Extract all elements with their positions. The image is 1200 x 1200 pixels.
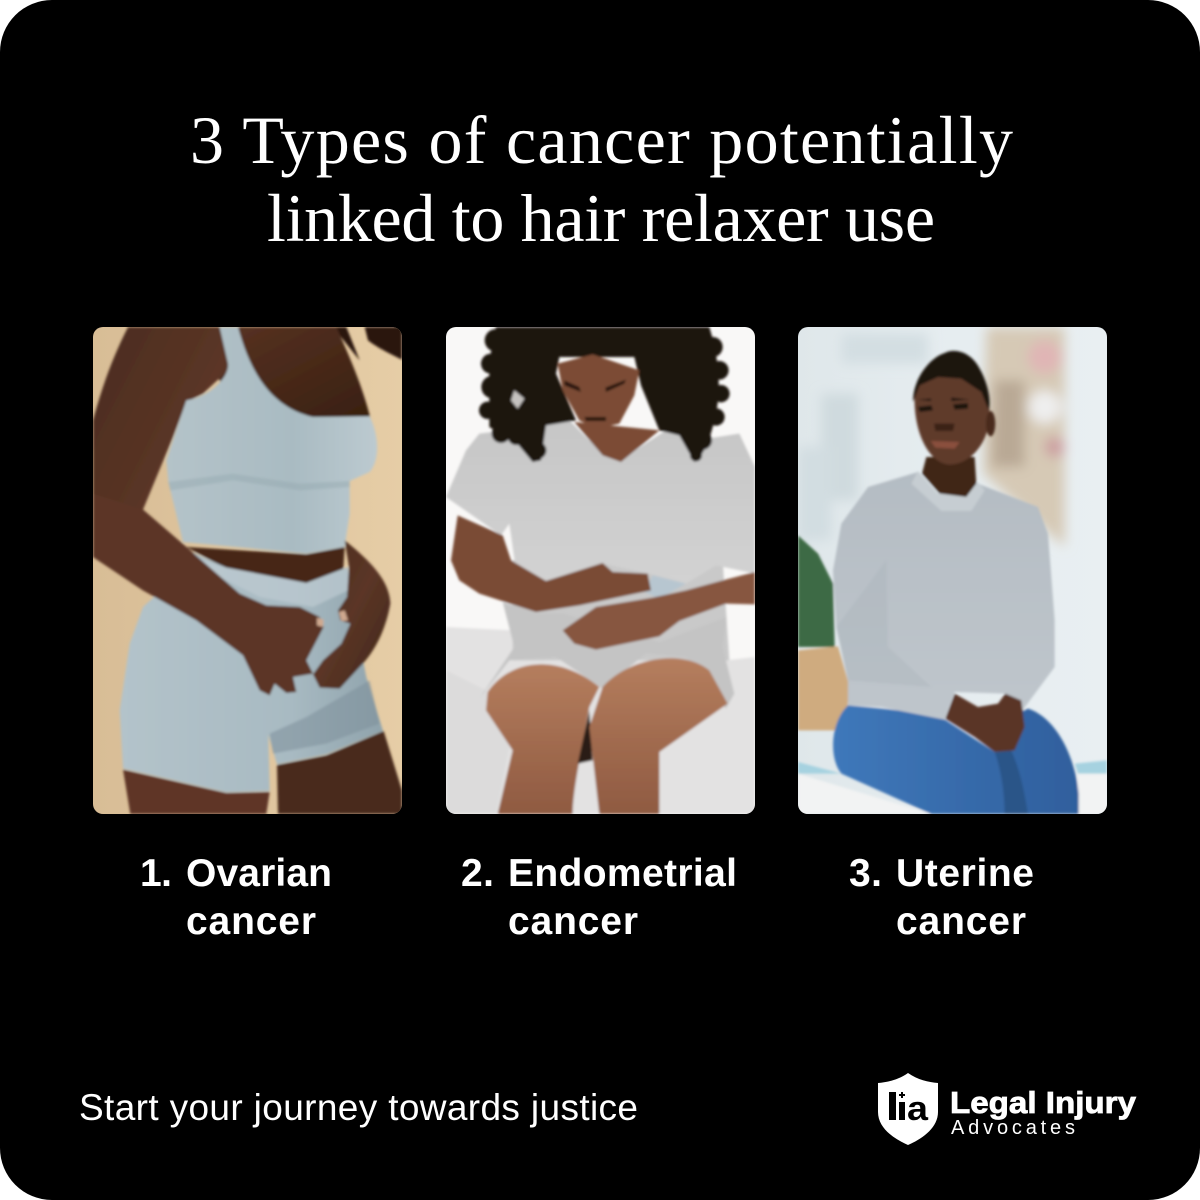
label: 2. Endometrial cancer: Endometrial [508,852,737,895]
photo: ovarian cancer, woman holding lower abdomen [93,327,402,814]
label: 3. Uterine cancer [849,852,1034,943]
label: 2. Endometrial cancer: 2. [461,852,494,895]
icon: shield: a [907,1090,929,1128]
label: 3. Uterine cancer: Uterine [896,852,1034,895]
label: 2. Endometrial cancer [461,852,737,943]
label: 2. Endometrial cancer: cancer [508,900,638,943]
logo wordmark: Advocates [951,1117,1075,1139]
logo: Legal Injury Advocates [878,1073,1137,1145]
logo wordmark: Legal Injury [950,1085,1137,1120]
label: 3. Uterine cancer: cancer [896,900,1026,943]
label: 1. Ovarian cancer [140,852,332,943]
photo: uterine cancer, worried woman sitting on examination bed [798,327,1107,814]
photo: endometrial cancer, woman with curly hair holding stomach [446,327,755,814]
title: 3 Types of cancer potentially [190,102,1013,178]
label: 1. Ovarian cancer: 1. [140,852,172,895]
label: 3. Uterine cancer: 3. [849,852,882,895]
label: 1. Ovarian cancer: cancer [186,900,316,943]
icon: shield [878,1073,938,1145]
label: 1. Ovarian cancer: Ovarian [186,852,332,895]
tagline: Start your journey towards justice [79,1087,638,1128]
logo wordmark [950,1085,1137,1139]
title [190,102,1013,256]
title: linked to hair relaxer use [267,180,935,256]
